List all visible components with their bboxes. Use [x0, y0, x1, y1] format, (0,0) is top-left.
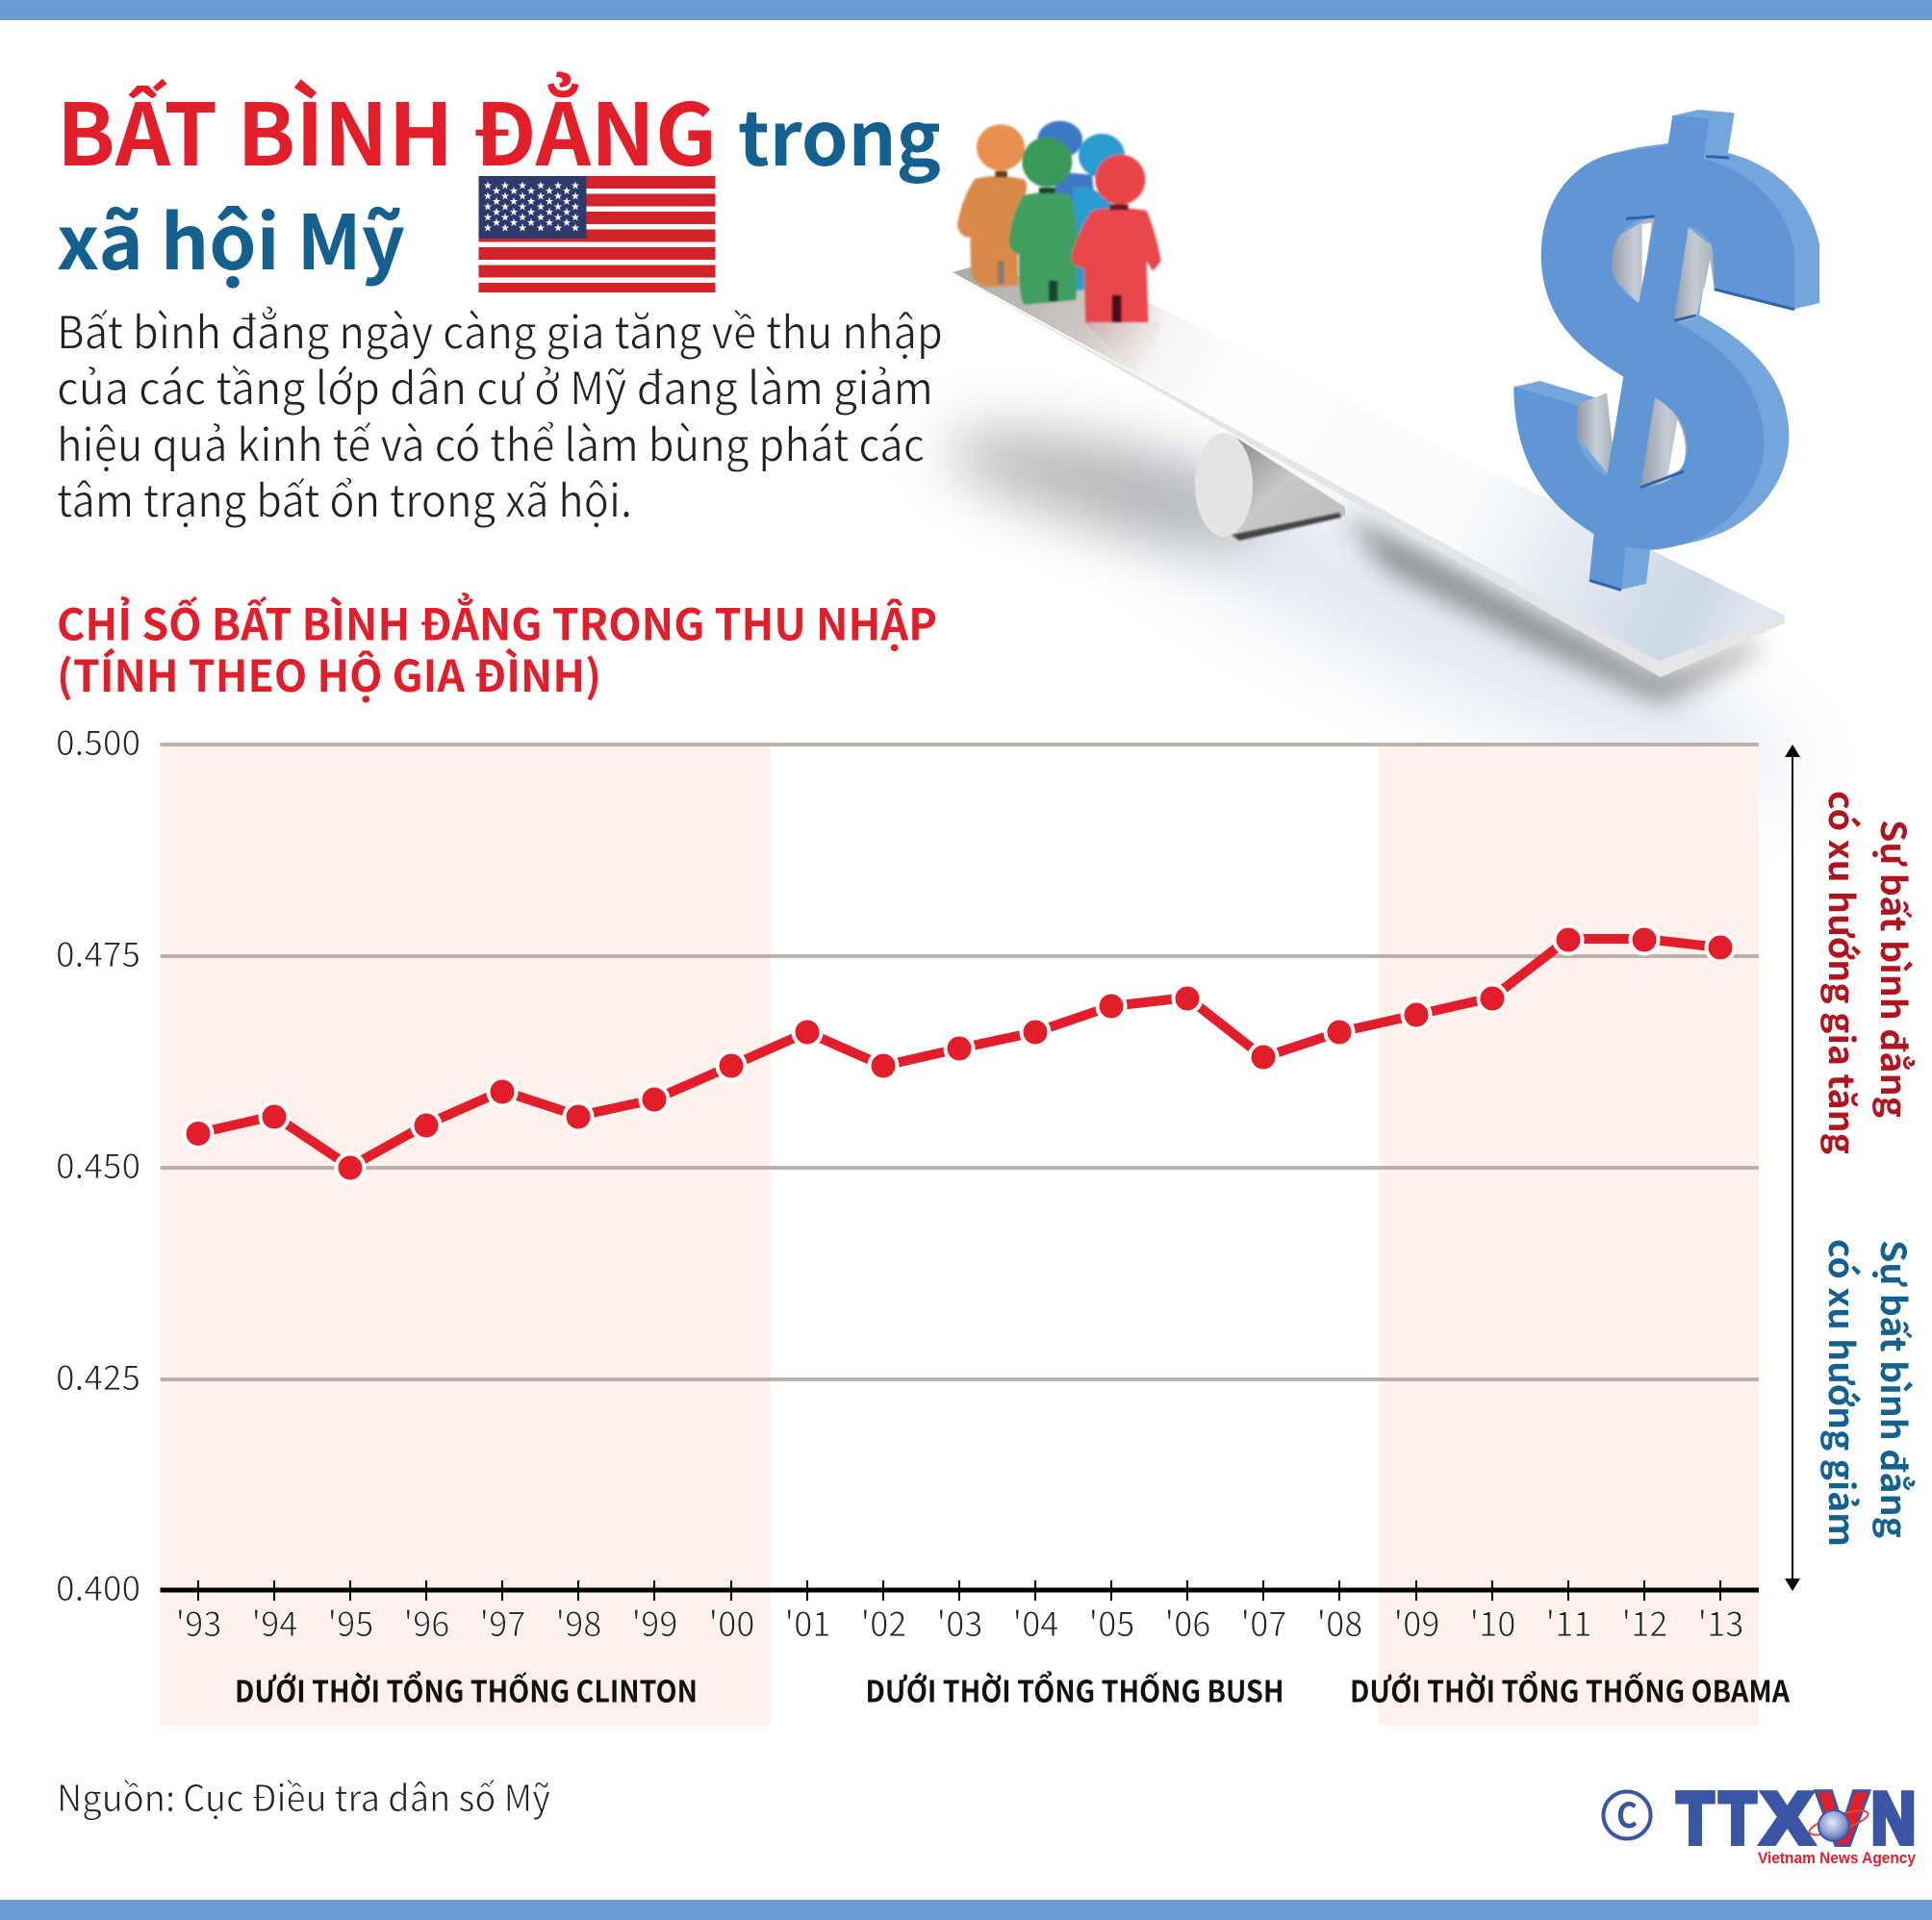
- agency name: Vietnam News Agency: [1758, 1849, 1916, 1867]
- intro paragraph: của các tầng lớp dân cư ở Mỹ đang làm giảm: [57, 352, 933, 417]
- icon: US flag: ★★★★★★: [483, 200, 580, 213]
- x axis year labels: '02: [860, 1597, 906, 1647]
- wordmark: T: [1677, 1778, 1714, 1858]
- side note: inequality decreasing: [1818, 1239, 1920, 1547]
- icon: US flag: ★★★★★★: [483, 189, 580, 202]
- intro paragraph: hiệu quả kinh tế và có thể làm bùng phát các: [57, 408, 925, 475]
- grid lines: [160, 745, 1759, 1379]
- x axis year labels: '94: [252, 1597, 298, 1647]
- side note: inequality decreasing: có xu hướng giảm: [1818, 1239, 1868, 1547]
- copyright symbol: [1603, 1788, 1651, 1839]
- side note: inequality increasing: Sự bất bình đẳng: [1870, 820, 1920, 1118]
- intro paragraph: [57, 296, 943, 531]
- title: [57, 66, 941, 291]
- x axis year labels: '97: [479, 1597, 525, 1647]
- dollar counter interiors: [1576, 215, 1715, 489]
- x axis with ticks: [160, 1580, 1759, 1601]
- chart heading: (TÍNH THEO HỘ GIA ĐÌNH): [57, 642, 601, 704]
- person: green: [1008, 137, 1078, 305]
- soft shadow beneath seesaw: [938, 407, 1822, 844]
- logo: TTXVN: [1603, 1778, 1916, 1867]
- icon: US flag: ★★★★★: [492, 206, 572, 217]
- side note: inequality decreasing: Sự bất bình đẳng: [1870, 1240, 1920, 1538]
- icon: US flag: ★★★★★: [492, 194, 572, 208]
- copyright symbol: C: [1616, 1788, 1638, 1838]
- bottom bar: [0, 1900, 1932, 1920]
- person: blue: [1037, 121, 1095, 207]
- intro paragraph: Bất bình đẳng ngày càng gia tăng về thu nhập: [57, 296, 943, 362]
- dollar front face: [1513, 115, 1794, 590]
- y axis labels: 0.425: [56, 1351, 140, 1401]
- x axis year labels: '04: [1012, 1597, 1058, 1647]
- data line: [198, 939, 1720, 1167]
- fulcrum cylinder: [1195, 433, 1345, 541]
- x axis year labels: '03: [937, 1597, 983, 1647]
- x axis year labels: '01: [785, 1597, 831, 1647]
- dollar dark edge accents: [1589, 157, 1794, 590]
- x axis year labels: '99: [631, 1597, 677, 1647]
- x axis year labels: '05: [1089, 1597, 1135, 1647]
- side note: inequality increasing: [1818, 791, 1920, 1154]
- person: cyan: [1073, 134, 1125, 291]
- x axis year labels: '08: [1316, 1597, 1362, 1647]
- source note: Nguồn: Cục Điều tra dân số Mỹ: [57, 1769, 550, 1822]
- wordmark: T: [1719, 1778, 1756, 1858]
- wordmark: N: [1871, 1778, 1916, 1858]
- x axis year labels: '00: [708, 1597, 754, 1647]
- wordmark: V: [1818, 1778, 1867, 1858]
- icon: US flag: ★★★★★★: [483, 221, 580, 234]
- icon: US flag: ★★★★★: [492, 215, 572, 229]
- side note: inequality increasing: có xu hướng gia tăng: [1818, 791, 1868, 1154]
- x axis year labels: '93: [175, 1597, 221, 1647]
- people figures: [957, 121, 1161, 322]
- presidency labels: DƯỚI THỜI TỔNG THỐNG CLINTON: [235, 1668, 698, 1710]
- dollar sign: [1513, 110, 1819, 590]
- presidency labels: [235, 1668, 1790, 1710]
- title: blue second line: xã hội Mỹ: [57, 184, 405, 291]
- x axis year labels: '07: [1241, 1597, 1287, 1647]
- y axis labels: 0.500: [56, 716, 140, 766]
- x axis year labels: '11: [1545, 1597, 1591, 1647]
- globe with orbit: [1807, 1806, 1870, 1841]
- person: orange: [957, 124, 1027, 287]
- icon: US flag: [479, 176, 716, 292]
- seesaw board: [953, 266, 1785, 677]
- presidency labels: DƯỚI THỜI TỔNG THỐNG BUSH: [866, 1668, 1284, 1710]
- intro paragraph: tâm trạng bất ổn trong xã hội.: [57, 464, 632, 531]
- presidency labels: DƯỚI THỜI TỔNG THỐNG OBAMA: [1350, 1668, 1790, 1710]
- wordmark: X: [1762, 1778, 1813, 1858]
- x axis year labels: '96: [404, 1597, 450, 1647]
- y axis labels: 0.450: [56, 1139, 140, 1189]
- line chart: [56, 716, 1790, 1726]
- top bar: [0, 0, 1932, 20]
- x axis year labels: '10: [1470, 1597, 1516, 1647]
- data points: [185, 925, 1734, 1181]
- y axis labels: [56, 716, 140, 1611]
- presidency band: Clinton: [160, 745, 770, 1726]
- icon: US flag: ★★★★★★: [483, 179, 580, 191]
- chart heading: [57, 591, 937, 704]
- presidency band: Obama: [1379, 745, 1759, 1726]
- x axis year labels: '13: [1697, 1597, 1743, 1647]
- x axis year labels: '06: [1164, 1597, 1210, 1647]
- illustration: seesaw with people and dollar sign: [938, 110, 1822, 844]
- person: red: [1071, 155, 1161, 322]
- chart heading: CHỈ SỐ BẤT BÌNH ĐẲNG TRONG THU NHẬP: [57, 591, 937, 652]
- title: blue trong: trong: [738, 80, 941, 188]
- double arrow: [1785, 745, 1800, 1591]
- title: red part: BẤT BÌNH ĐẲNG: [57, 66, 717, 190]
- wordmark: V: [1818, 1778, 1867, 1858]
- y axis labels: 0.475: [56, 927, 140, 977]
- x axis year labels: '12: [1622, 1597, 1668, 1647]
- wordmark: [1677, 1778, 1916, 1858]
- icon: US flag: ★★★★★: [492, 185, 572, 196]
- x axis year labels: '95: [327, 1597, 373, 1647]
- icon: US flag: ★★★★★★: [483, 211, 580, 223]
- x axis year labels: '98: [556, 1597, 602, 1647]
- dollar depth faces: [1515, 110, 1819, 590]
- x axis year labels: '09: [1393, 1597, 1439, 1647]
- y axis labels: 0.400: [56, 1561, 140, 1611]
- x axis year labels: [175, 1597, 1743, 1647]
